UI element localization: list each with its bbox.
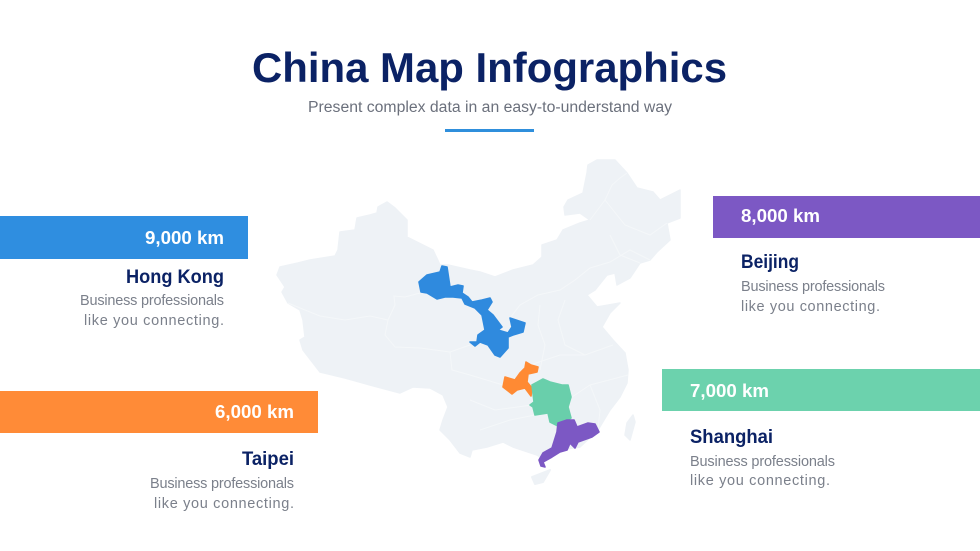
base map Hainan — [532, 470, 550, 484]
title divider — [445, 129, 534, 132]
description — [150, 476, 294, 512]
description: Business professionals — [741, 279, 885, 295]
value bar — [662, 369, 980, 411]
description: like you connecting. — [741, 299, 880, 315]
value: 6,000 km — [215, 402, 294, 422]
panel: Taipei — [0, 391, 318, 512]
description: Business professionals — [150, 476, 294, 492]
map of China — [277, 160, 680, 484]
panel: Shanghai — [662, 369, 980, 489]
description — [80, 293, 224, 329]
description: Business professionals — [690, 454, 835, 470]
highlighted region: Chongqing orange — [503, 362, 538, 396]
description — [741, 279, 885, 315]
value: 9,000 km — [145, 228, 224, 248]
subtitle: Present complex data in an easy-to-understand way — [308, 99, 672, 116]
value bar — [0, 216, 248, 259]
value bar — [713, 196, 980, 238]
description: like you connecting. — [690, 473, 830, 489]
description: like you connecting. — [154, 496, 294, 512]
base map Taiwan — [625, 415, 635, 440]
highlighted region: Hunan green — [530, 379, 571, 426]
value: 8,000 km — [741, 206, 820, 226]
base map mainland — [277, 160, 680, 457]
value: 7,000 km — [690, 381, 769, 401]
description: Business professionals — [80, 293, 224, 309]
city name: Hong Kong — [126, 267, 224, 288]
city name: Shanghai — [690, 427, 773, 448]
description: like you connecting. — [84, 313, 224, 329]
province borders — [288, 173, 667, 430]
city name: Beijing — [741, 252, 799, 273]
panel: Hong Kong — [0, 216, 248, 329]
description — [690, 454, 835, 489]
highlighted region: Guangdong purple — [539, 420, 599, 467]
panel: Beijing — [713, 196, 980, 315]
highlighted region: Gansu blue — [419, 266, 525, 357]
value bar — [0, 391, 318, 433]
city name: Taipei — [242, 449, 294, 470]
title: China Map Infographics — [252, 44, 727, 91]
